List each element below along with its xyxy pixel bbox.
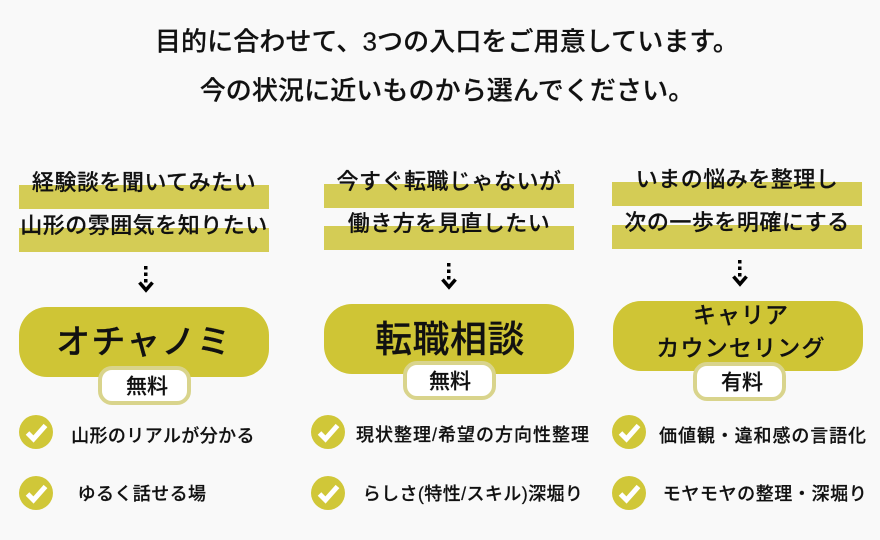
price badge — [403, 361, 496, 400]
service pill — [324, 304, 574, 374]
service name: オチャノミ — [56, 324, 232, 362]
audience text 2: 次の一歩を明確にする — [624, 210, 850, 235]
arrow — [138, 266, 154, 293]
service pill — [19, 307, 269, 377]
highlight bar 1 — [324, 184, 574, 208]
title line 2: 今の状況に近いものから選んでください。 — [200, 75, 694, 105]
audience text 1: 今すぐ転職じゃないが — [336, 169, 562, 194]
audience text 1: 経験談を聞いてみたい — [32, 170, 256, 195]
icon: check — [19, 476, 53, 510]
price text: 無料 — [429, 370, 471, 393]
arrow — [441, 263, 457, 290]
price badge — [693, 362, 786, 401]
benefit text: ゆるく話せる場 — [78, 484, 206, 504]
highlight bar 2 — [324, 226, 574, 250]
arrow — [732, 260, 748, 287]
price text: 有料 — [721, 371, 763, 394]
icon: check — [19, 415, 53, 449]
benefit text: 現状整理/希望の方向性整理 — [356, 425, 590, 445]
panel: キャリアカウンセリング — [612, 167, 867, 510]
service name: 転職相談 — [375, 318, 525, 359]
highlight bar 1 — [612, 182, 862, 206]
benefit text: らしさ(特性/スキル)深堀り — [363, 484, 583, 504]
audience text 2: 山形の雰囲気を知りたい — [20, 213, 268, 238]
price text: 無料 — [126, 375, 168, 398]
title — [155, 26, 739, 105]
title line 1: 目的に合わせて、3つの入口をご用意しています。 — [155, 26, 739, 56]
icon: check — [612, 415, 646, 449]
icon: check — [311, 415, 345, 449]
highlight bar 2 — [612, 225, 862, 249]
audience text 2: 働き方を見直したい — [348, 211, 550, 236]
benefit text: 価値観・違和感の言語化 — [659, 426, 867, 446]
service name line 1: キャリア — [693, 302, 789, 328]
audience text 1: いまの悩みを整理し — [636, 167, 838, 192]
highlight bar 1 — [19, 185, 269, 209]
panel: オチャノミ — [19, 170, 269, 510]
icon: check — [311, 476, 345, 510]
benefit text: 山形のリアルが分かる — [71, 426, 255, 446]
price badge — [98, 366, 191, 405]
benefit text: モヤモヤの整理・深堀り — [663, 484, 867, 504]
service name line 2: カウンセリング — [656, 335, 826, 361]
highlight bar 2 — [19, 228, 269, 252]
panel: 転職相談 — [311, 169, 590, 510]
service pill — [613, 301, 863, 371]
icon: check — [612, 476, 646, 510]
